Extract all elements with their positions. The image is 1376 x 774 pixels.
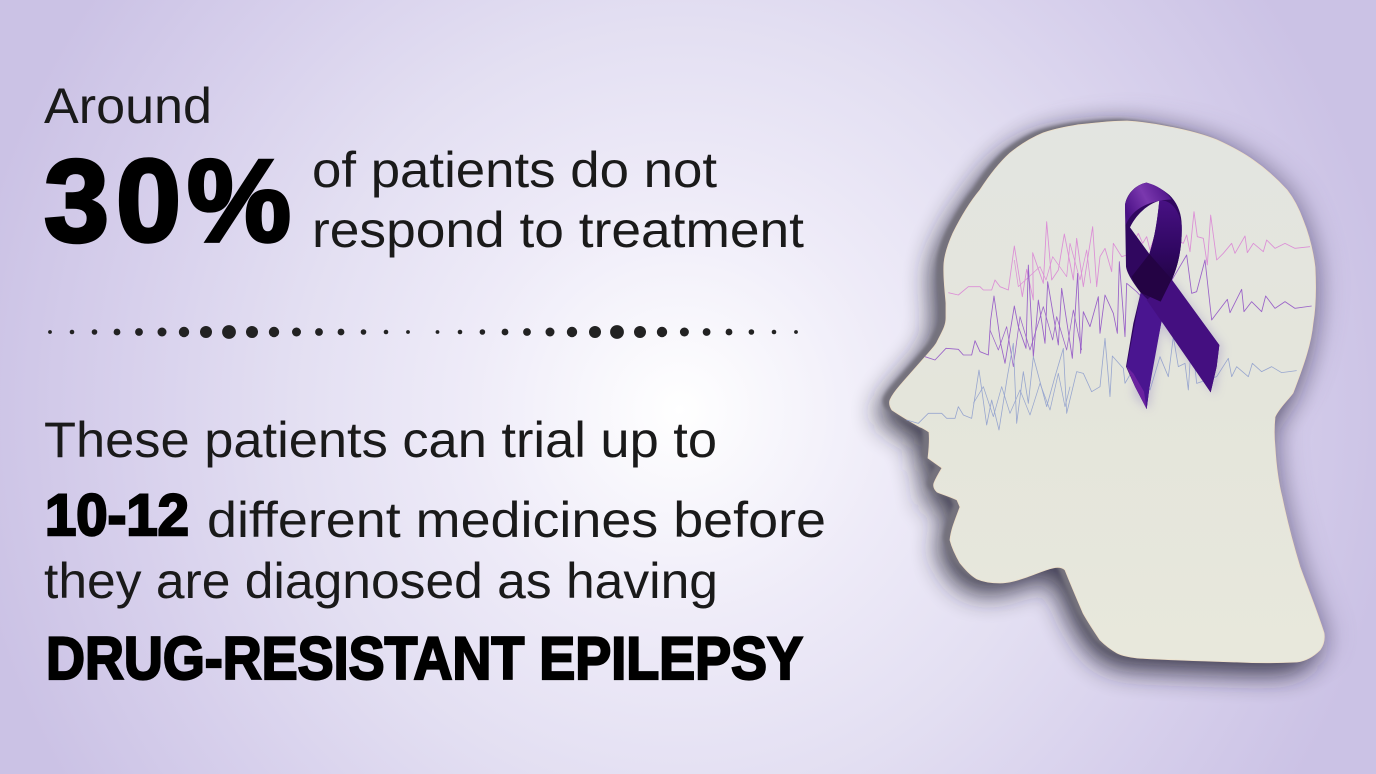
statistic: 10-12: 10-12 — [45, 483, 189, 548]
head silhouette — [890, 121, 1324, 663]
text: they are diagnosed as having: they are diagnosed as having — [44, 553, 718, 609]
text: different medicines before: different medicines before — [207, 492, 826, 548]
brain waves and ribbon — [907, 183, 1312, 430]
ribbon shadow — [1133, 279, 1223, 410]
wave: pink — [948, 212, 1310, 300]
text: of patients do not respond to treatment: respond to treatment — [312, 202, 804, 258]
wave: pink inner strand — [1014, 243, 1091, 287]
text: these patients can trial up to: These patients can trial up to — [44, 412, 717, 468]
statistic: 30%: 30% — [44, 135, 291, 266]
text: of patients do not respond to treatment — [312, 142, 804, 258]
icon: purple ribbon — [1125, 183, 1219, 409]
illustration: head with ribbon — [879, 119, 1330, 673]
text: around: Around — [44, 78, 212, 134]
wave: blue — [907, 337, 1297, 430]
head shadow — [879, 119, 1330, 673]
wave: purple inner strand — [990, 307, 1082, 367]
dotted divider — [48, 325, 798, 339]
text: of patients do not respond to treatment: of patients do not — [312, 142, 717, 198]
wave: purple — [925, 255, 1312, 363]
heading: drug-resistant epilepsy: DRUG-RESISTANT EPILEPSY — [46, 625, 803, 692]
wave: blue inner strand — [973, 373, 1070, 417]
